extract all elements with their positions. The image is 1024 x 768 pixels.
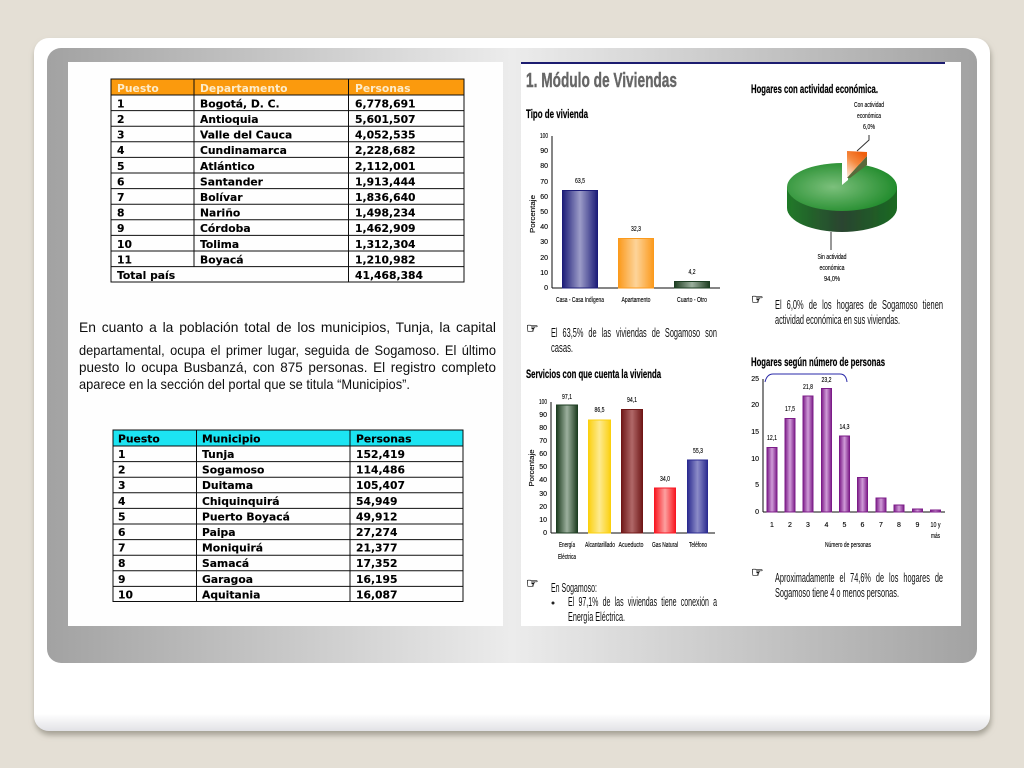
table: municipios: 9 [118,573,125,586]
text block: note on services: Energía Eléctrica. [568,610,625,624]
table: departamentos: 6,778,691 [355,97,416,110]
chart: Hogares según número de personas: 14,3 [840,424,850,431]
chart: Tipo de vivienda: 50 [540,209,548,216]
chart: Servicios con que cuenta la vivienda: 0 [543,530,547,537]
chart: Tipo de vivienda: 4,2 [688,269,696,276]
chart: Tipo de vivienda: Cuarto - Otro [677,297,707,304]
chart: Hogares según número de personas: 2 [788,522,792,529]
text block: note on household size: ☞ [751,565,764,581]
chart: Hogares con actividad económica: Sin actividad [818,254,847,261]
chart: Tipo de vivienda: Porcentaje [530,195,537,233]
chart: Hogares según número de personas: 5 [843,522,847,529]
table: municipios: Aquitania [202,588,260,601]
table: departamentos: 8 [117,207,124,220]
text block: municipal population paragraph: aparece en la sección del portal que se titula “Municipios”. [79,376,410,392]
text block: municipal population paragraph: puesto lo ocupa Busbanzá, con 875 personas. El registro completo [79,359,496,375]
chart: Servicios con que cuenta la vivienda: Alcantarillado [585,542,615,549]
chart: Servicios con que cuenta la vivienda: Servicios con que cuenta la vivienda [526,369,661,381]
table: departamentos: 11 [117,253,132,266]
panel: left page with population tables [68,62,503,626]
chart: Servicios con que cuenta la vivienda: Teléfono [689,542,707,549]
table: departamentos [111,79,464,282]
table: departamentos: 10 [117,238,132,251]
table: municipios: Municipio [202,432,261,446]
chart: Hogares según número de personas [751,357,945,549]
table: municipios: 5 [118,510,125,523]
table: departamentos: Tolima [200,238,239,251]
table: departamentos: Nariño [200,207,240,220]
table: municipios [113,430,463,602]
table: departamentos: 7 [117,191,124,204]
table: municipios: Puerto Boyacá [202,510,290,523]
text block: note on services [526,576,717,624]
table: municipios: Samacá [202,557,249,570]
chart: Tipo de vivienda: Casa - Casa Indígena [556,297,604,304]
chart: Tipo de vivienda: 10 [540,270,548,277]
text block: note on services: En Sogamoso: [551,581,597,595]
chart: Servicios con que cuenta la vivienda: 10 [539,517,547,524]
chart: Servicios con que cuenta la vivienda [526,369,715,561]
chart: Servicios con que cuenta la vivienda: Porcentaje [529,449,536,486]
chart: Hogares según número de personas: 20 [751,402,759,409]
orange slice [847,151,867,178]
chart: Tipo de vivienda [526,109,720,304]
table: municipios: 21,377 [356,542,397,555]
chart: Hogares según número de personas: 21,8 [803,384,813,391]
table: municipios: 10 [118,588,133,601]
text block: note on vivienda type: casas. [551,341,573,355]
table: municipios: 1 [118,448,125,461]
table: municipios: 54,949 [356,495,397,508]
chart: Servicios con que cuenta la vivienda: 70 [539,438,547,445]
table: municipios: 6 [118,526,125,539]
table: departamentos: 9 [117,222,124,235]
chart: Hogares con actividad económica: Hogares con actividad económica. [751,84,878,96]
chart: Hogares con actividad económica: económica [857,113,881,120]
chart: Hogares según número de personas: 5 [755,482,759,489]
chart: Hogares según número de personas: 12,1 [767,435,777,442]
table: departamentos: Total país [117,269,175,282]
chart: Tipo de vivienda: Apartamento [622,297,651,304]
chart: Hogares según número de personas: Hogares según número de personas [751,357,885,369]
table: municipios: 3 [118,479,125,492]
table: municipios: Duitama [202,479,253,492]
table: municipios: 16,195 [356,573,397,586]
chart: Hogares según número de personas: 25 [751,376,759,383]
table: departamentos: 2,228,682 [355,144,416,157]
chart: Hogares según número de personas: Número de personas [825,542,871,549]
text block: note on vivienda type [526,321,717,355]
chart: Tipo de vivienda: 90 [540,148,548,155]
text block: note on services: ☞ [526,576,539,592]
table: municipios: Puesto [118,432,160,446]
table: departamentos: Antioquia [200,113,258,126]
table: departamentos: 1 [117,97,124,110]
chart: Hogares según número de personas: 4 [825,522,829,529]
table: departamentos: 2,112,001 [355,160,416,173]
table: municipios: Tunja [202,448,234,461]
table: departamentos: Cundinamarca [200,144,287,157]
chart: Servicios con que cuenta la vivienda: 86,5 [594,407,605,414]
table: departamentos: 1,836,640 [355,191,416,204]
chart: Tipo de vivienda: Tipo de vivienda [526,109,588,121]
chart: Hogares según número de personas: 8 [897,522,901,529]
table: municipios: 8 [118,557,125,570]
chart: Servicios con que cuenta la vivienda: 20 [539,504,547,511]
chart: Tipo de vivienda: 40 [540,224,548,231]
chart: Hogares según número de personas: 6 [861,522,865,529]
table: departamentos: Bogotá, D. C. [200,97,280,110]
chart: Hogares según número de personas: 17,5 [785,406,795,413]
chart: Servicios con que cuenta la vivienda: 94,1 [627,397,637,404]
chart: Hogares según número de personas: 15 [751,429,759,436]
chart: Tipo de vivienda: 20 [540,255,548,262]
chart: Servicios con que cuenta la vivienda: 60 [539,451,547,458]
table: municipios: Garagoa [202,573,253,586]
chart: Servicios con que cuenta la vivienda: 30 [539,491,547,498]
pie side [787,187,897,232]
table: departamentos: 1,498,234 [355,207,416,220]
chart: Servicios con que cuenta la vivienda: 80 [539,425,547,432]
table: departamentos: Boyacá [200,253,243,266]
table: departamentos: Departamento [200,82,288,95]
table: municipios: Personas [356,432,412,446]
table: departamentos: 5,601,507 [355,113,416,126]
text block: note on vivienda type: ☞ [526,321,539,337]
chart: Servicios con que cuenta la vivienda: Eléctrica [558,554,576,561]
chart: Tipo de vivienda: 0 [544,285,548,292]
chart: Servicios con que cuenta la vivienda: 100 [539,399,547,406]
chart: Hogares según número de personas: 10 y [930,522,941,529]
chart: Tipo de vivienda: 63,5 [575,178,585,185]
table: departamentos: Valle del Cauca [200,129,292,142]
table: departamentos: 1,312,304 [355,238,416,251]
chart: Servicios con que cuenta la vivienda: Gas Natural [652,542,678,549]
chart: Hogares según número de personas: más [931,533,940,540]
table: departamentos: Personas [355,82,411,95]
table: municipios: 49,912 [356,510,397,523]
table: departamentos: 1,913,444 [355,175,416,188]
table: municipios: Paipa [202,526,235,539]
table: departamentos: Atlántico [200,160,255,173]
table: departamentos: 6 [117,175,124,188]
chart: Servicios con que cuenta la vivienda: Energía [559,542,575,549]
table: municipios: 4 [118,495,125,508]
pie top [787,163,897,211]
chart: Hogares según número de personas: 3 [806,522,810,529]
chart: Hogares según número de personas: 0 [755,509,759,516]
chart: Hogares según número de personas: 1 [770,522,774,529]
chart: Hogares según número de personas: 23,2 [822,377,832,384]
table: municipios: 17,352 [356,557,397,570]
table: departamentos: 3 [117,129,124,142]
chart: Hogares según número de personas: 7 [879,522,883,529]
chart: Hogares con actividad económica: Con actividad [854,102,884,109]
orange slice side [847,156,867,178]
table: departamentos: 2 [117,113,124,126]
chart: Hogares según número de personas: 10 [751,456,759,463]
table: municipios: 114,486 [356,464,405,477]
chart: Hogares con actividad económica: económica [820,265,845,272]
table: municipios: Chiquinquirá [202,495,280,508]
table: departamentos: Santander [200,175,264,188]
table: departamentos: 41,468,384 [355,269,423,282]
table: departamentos: Córdoba [200,222,251,235]
text block: note on economic activity [751,292,943,327]
chart: Tipo de vivienda: 100 [540,133,548,140]
chart: Servicios con que cuenta la vivienda: 34,0 [660,476,670,483]
text block: municipal population paragraph: En cuanto a la población total de los municipios, Tunja, la capital [79,319,496,335]
chart: Servicios con que cuenta la vivienda: 55,3 [693,448,703,455]
text block: note on household size [751,565,943,600]
chart: Tipo de vivienda: 60 [540,194,548,201]
text block: municipal population paragraph [79,319,496,392]
table: municipios: 7 [118,542,125,555]
table: departamentos: 1,210,982 [355,253,416,266]
chart: Tipo de vivienda: 30 [540,239,548,246]
table: municipios: 27,274 [356,526,397,539]
table: municipios: 105,407 [356,479,405,492]
chart: Hogares con actividad económica: 6,0% [863,124,875,131]
chart: Tipo de vivienda: 70 [540,179,548,186]
heading: Módulo de Viviendas: 1. Módulo de Viviendas [526,70,677,92]
chart: Tipo de vivienda: 32,3 [631,226,641,233]
chart: Servicios con que cuenta la vivienda: 97,1 [562,394,572,401]
table: municipios: Sogamoso [202,464,264,477]
chart: Tipo de vivienda: 80 [540,163,548,170]
chart: Hogares con actividad económica: 94,0% [824,276,840,283]
text block: note on services: El 97,1% de las viviendas tiene conexión a [568,595,717,609]
chart: Hogares con actividad económica [751,84,897,283]
chart: Servicios con que cuenta la vivienda: Acueducto [618,542,644,549]
table: departamentos: 4 [117,144,124,157]
chart: Servicios con que cuenta la vivienda: 50 [539,464,547,471]
panel: right page with housing charts [521,62,961,626]
text block: note on household size: Sogamoso tiene 4 o menos personas. [775,586,899,600]
pie gap [842,160,848,185]
table: departamentos: 4,052,535 [355,129,416,142]
text block: note on economic activity: ☞ [751,292,764,308]
chart: Hogares según número de personas: 9 [916,522,920,529]
table: departamentos: Bolívar [200,191,243,204]
chart: Servicios con que cuenta la vivienda: 40 [539,477,547,484]
table: departamentos: Puesto [117,82,159,95]
table: municipios: Moniquirá [202,542,263,555]
table: departamentos: 1,462,909 [355,222,416,235]
text block: municipal population paragraph: departamental, ocupa el primer lugar, seguida de Sogamoso. El último [79,342,496,358]
table: municipios: 16,087 [356,588,397,601]
table: municipios: 2 [118,464,125,477]
table: departamentos: 5 [117,160,124,173]
text block: note on vivienda type: El 63,5% de las viviendas de Sogamoso son [551,326,717,340]
gray picture frame panel [47,48,977,663]
chart: Servicios con que cuenta la vivienda: 90 [539,412,547,419]
table: municipios: 152,419 [356,448,405,461]
text block: note on economic activity: actividad económica en sus viviendas. [775,313,900,327]
